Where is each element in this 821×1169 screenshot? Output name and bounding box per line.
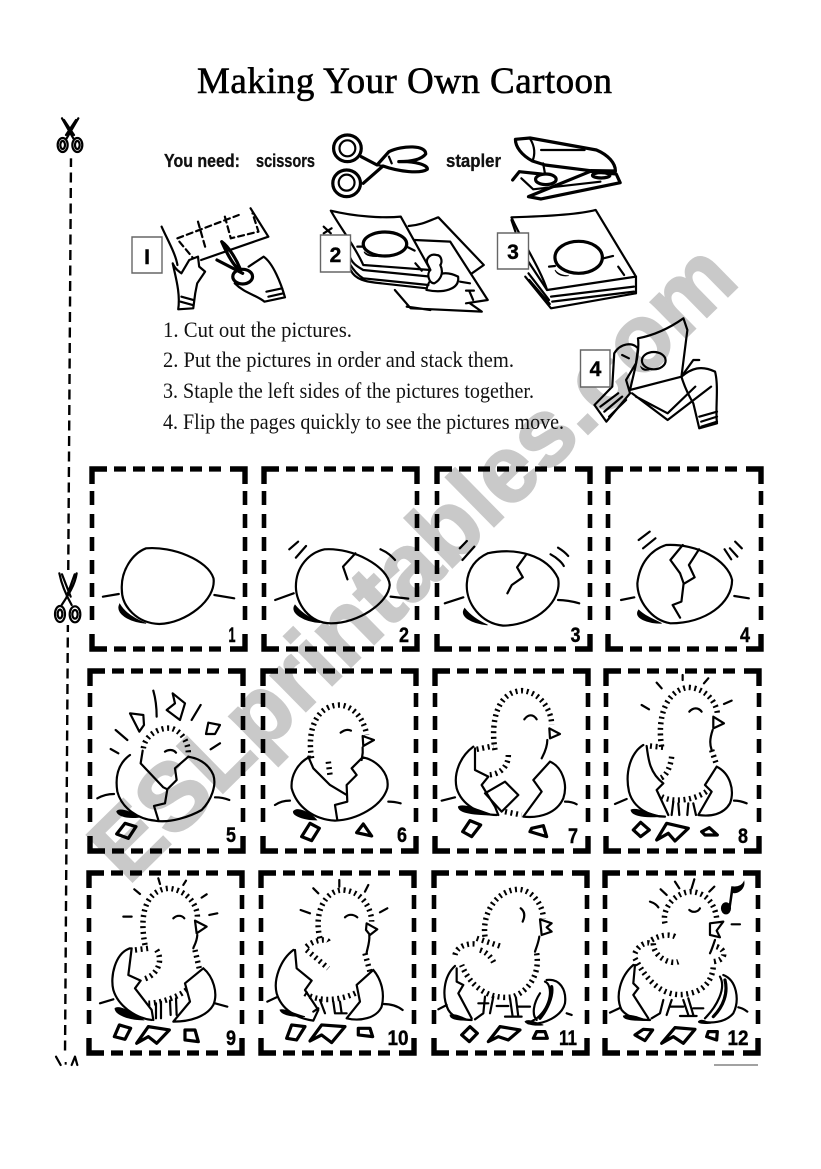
panel: frame 4: [608, 469, 761, 649]
panel: frame 6: [263, 671, 416, 851]
illustration: flipping pages: [594, 318, 717, 428]
number 1: 1: [228, 624, 236, 647]
watermark: ESLprintables.com: [68, 223, 756, 901]
chick head out of egg: [275, 705, 401, 841]
icon: bottom scissors fragment: [56, 1057, 77, 1065]
panel: frame 7: [435, 671, 588, 851]
number 6: 6: [397, 824, 407, 847]
illustration: stacked pictures: [511, 210, 636, 308]
step 2 illustration: [320, 211, 488, 312]
egg with longer crack: [445, 541, 579, 626]
panel: frame 10: [261, 873, 414, 1053]
chick breaking out of egg: [97, 691, 229, 838]
step 1 illustration: [132, 208, 285, 309]
step 4 illustration: [580, 318, 717, 428]
singing chick: [610, 879, 747, 1043]
number box 3: 3: [507, 241, 519, 264]
step 3 illustration: [498, 210, 636, 308]
chick with shell lowered: [100, 878, 227, 1043]
number 9: 9: [226, 1027, 236, 1050]
egg with two cracks: [621, 532, 749, 623]
number box 4: 4: [590, 358, 602, 381]
panel: frame 8: [606, 671, 759, 851]
panel: frame 3: [437, 469, 590, 649]
panel: frame 2: [264, 469, 417, 649]
cut line with scissors: [52, 115, 87, 1065]
title: Making Your Own Cartoon: [197, 61, 612, 102]
number 10: 10: [388, 1027, 408, 1050]
label: you need: You need:: [164, 151, 240, 171]
chick with wings: [267, 880, 403, 1043]
icon: top scissors: [53, 115, 87, 158]
chick looking up: [438, 889, 572, 1042]
icon: music note: [721, 882, 744, 914]
instructions: [163, 317, 564, 434]
number 7: 7: [568, 825, 578, 848]
number 2: 2: [399, 624, 409, 647]
instruction 4: 4. Flip the pages quickly to see the pictures move.: [163, 409, 564, 434]
icon: middle scissors: [52, 570, 83, 625]
number 8: 8: [738, 825, 748, 848]
number 3: 3: [570, 624, 580, 647]
number 4: 4: [740, 624, 750, 647]
number box 1: [132, 237, 162, 273]
number 12: 12: [728, 1027, 748, 1050]
panel: frame 5: [90, 671, 243, 851]
number box 2: 2: [330, 244, 341, 267]
label: scissors: scissors: [256, 151, 315, 171]
egg 1: [103, 548, 234, 624]
illustration: cutting paper: [162, 208, 285, 309]
icon: scissors: [333, 135, 427, 197]
number box 1: I: [144, 246, 150, 269]
label: stapler: stapler: [446, 151, 501, 171]
number 11: 11: [559, 1027, 577, 1050]
number box 2: [320, 235, 350, 272]
instruction 2: 2. Put the pictures in order and stack them.: [163, 347, 514, 372]
illustration: stacking pictures: [324, 211, 488, 312]
panel: frame 11: [434, 873, 587, 1053]
chick standing in shell: [615, 675, 747, 841]
instruction 1: 1. Cut out the pictures.: [163, 317, 352, 342]
chick rising from egg: [442, 691, 577, 837]
egg with first crack: [275, 542, 408, 623]
number 5: 5: [226, 824, 236, 847]
you need row: [164, 135, 620, 199]
panel: frame 12: [605, 873, 758, 1053]
panel: frame 9: [89, 873, 242, 1053]
panel: frame 1: [92, 469, 245, 649]
instruction 3: 3. Staple the left sides of the pictures together.: [163, 378, 534, 403]
icon: stapler: [513, 138, 620, 199]
